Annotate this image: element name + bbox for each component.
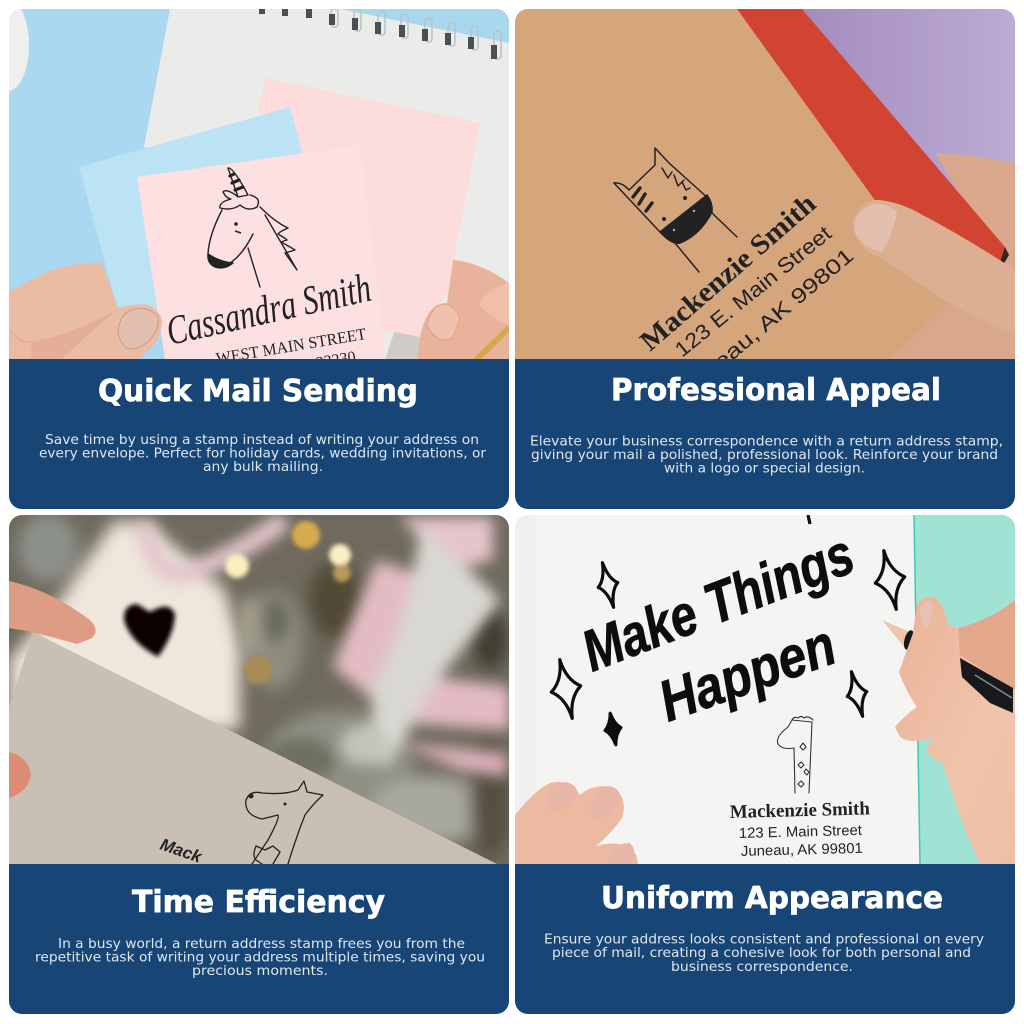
photo: unicorn stamp on pink note: 23230 — [315, 349, 357, 372]
photo: unicorn stamp on pink note — [0, 0, 509, 372]
description: Save time by using a stamp instead of writing your address on — [45, 433, 479, 448]
stamp text: 123 E. Main Street — [671, 222, 836, 362]
caption band — [9, 864, 509, 1014]
stamp text: Mack — [158, 835, 206, 867]
zebra drawing — [614, 148, 737, 272]
panel: uniform appearance — [515, 515, 1015, 1014]
giraffe drawing — [777, 716, 813, 793]
hand-lettered phrase: Make Things — [573, 521, 863, 684]
stamp text: Juneau, AK 99801 — [676, 244, 858, 402]
heading: Time Efficiency — [132, 885, 385, 920]
stamp name text: Cassandra Smith — [162, 264, 375, 354]
description: any bulk mailing. — [203, 460, 323, 475]
heading: Quick Mail Sending — [98, 374, 418, 409]
description: Elevate your business correspondence with a return address stamp, — [530, 434, 1003, 450]
panel: quick mail sending — [0, 0, 509, 509]
hand-lettered phrase — [584, 544, 853, 722]
photo: kangaroo stamp on grey card — [9, 514, 510, 867]
description — [35, 937, 485, 979]
description: business correspondence. — [671, 960, 853, 975]
panel: professional appeal — [515, 9, 1015, 509]
description — [530, 434, 1003, 476]
description — [39, 433, 487, 475]
description: every envelope. Perfect for holiday cards, wedding invitations, or — [39, 446, 487, 462]
description: piece of mail, creating a cohesive look for both personal and — [552, 946, 971, 961]
caption band — [9, 359, 509, 509]
description: repetitive task of writing your address multiple times, saving you — [35, 950, 485, 966]
left hand — [9, 263, 162, 359]
stamp address — [730, 798, 871, 860]
stamp address: 123 E. Main Street — [739, 823, 862, 842]
right hand — [418, 260, 509, 359]
stamp address text: WEST MAIN STREET — [215, 324, 368, 368]
description: giving your mail a polished, professional look. Reinforce your brand — [531, 448, 998, 463]
photo: zebra stamp on kraft envelope — [515, 9, 1015, 359]
kangaroo drawing — [246, 781, 323, 864]
stamp text: Mackenzie Smith — [634, 188, 822, 357]
finger top — [9, 581, 96, 644]
description — [544, 932, 984, 975]
caption band — [515, 864, 1015, 1014]
stamp address: Juneau, AK 99801 — [741, 841, 863, 860]
description: In a busy world, a return address stamp frees you from the — [58, 937, 465, 952]
right hand with pen — [882, 597, 1015, 864]
panel: time efficiency — [9, 514, 510, 1014]
left hand — [515, 782, 638, 864]
heading: Professional Appeal — [611, 373, 941, 408]
photo: make things happen stamp — [515, 515, 1015, 865]
sparkles — [545, 515, 911, 746]
heading: Uniform Appearance — [601, 881, 943, 916]
description: precious moments. — [192, 964, 328, 979]
unicorn drawing — [208, 168, 297, 287]
hand behind envelope — [880, 153, 1015, 359]
stamp address: Mackenzie Smith — [730, 798, 871, 823]
hand-lettered phrase: Happen — [651, 612, 844, 734]
finger lower — [9, 752, 31, 798]
caption band — [515, 359, 1015, 509]
description: Ensure your address looks consistent and professional on every — [544, 932, 984, 948]
description: with a logo or special design. — [664, 462, 865, 476]
thumb — [852, 200, 1004, 303]
